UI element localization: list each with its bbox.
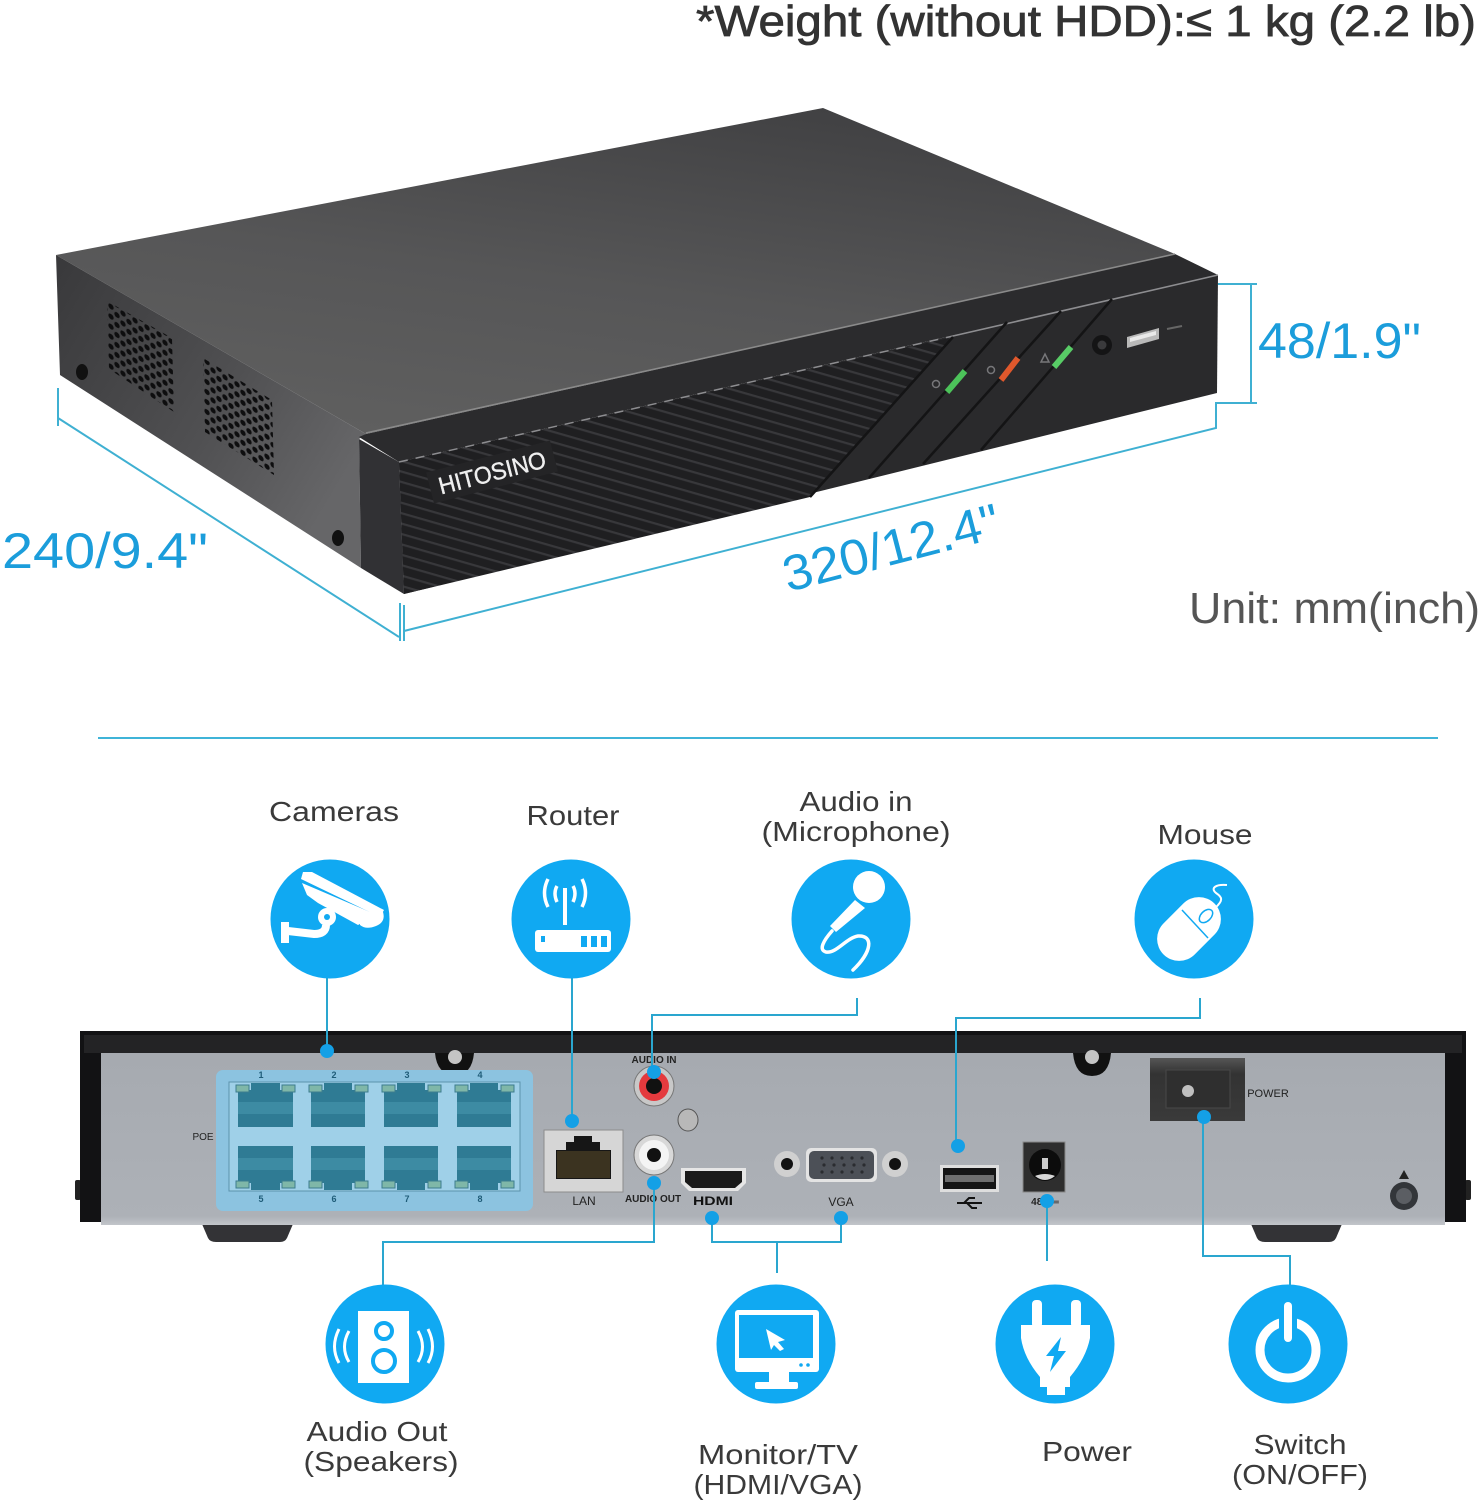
- rear panel of NVR: [75, 1031, 1471, 1242]
- front panel: [399, 275, 1218, 594]
- edge highlights: [366, 254, 1218, 462]
- audio out jack: [625, 1135, 681, 1205]
- port numbers: 6: [331, 1194, 337, 1204]
- ground screw small: [678, 1109, 698, 1131]
- dimension: height: 48/1.9": [1258, 313, 1421, 369]
- label: audio out: Audio Out: [306, 1416, 448, 1447]
- label: mouse: Mouse: [1158, 819, 1252, 850]
- dimension: height: [1218, 284, 1421, 402]
- label: cameras: Cameras: [269, 796, 399, 827]
- top surface: [56, 108, 1175, 434]
- label: switch: [1232, 1429, 1368, 1490]
- port numbers: 1: [258, 1070, 264, 1080]
- LAN port: [544, 1130, 623, 1208]
- USB mark: [1167, 326, 1182, 329]
- icon: mouse: [1134, 860, 1254, 978]
- logo: HITOSINO: [436, 447, 549, 500]
- label: audio in: Audio in: [800, 786, 912, 817]
- HDMI port: HDMI: [693, 1194, 733, 1208]
- ribbed front texture: [399, 337, 953, 594]
- port numbers: 2: [331, 1070, 337, 1080]
- side face: [56, 255, 366, 568]
- POE label: POE: [192, 1132, 214, 1143]
- port numbers: 4: [477, 1070, 483, 1080]
- audio in jack: AUDIO IN: [632, 1055, 676, 1066]
- front USB port: [1127, 328, 1159, 348]
- port numbers: 5: [258, 1194, 264, 1204]
- port numbers: [258, 1070, 483, 1204]
- LED symbols: [932, 354, 1049, 388]
- screw notch right: [1073, 1050, 1111, 1076]
- connector: router: [565, 978, 579, 1128]
- connector: power: [1040, 1194, 1054, 1261]
- audio out jack: AUDIO OUT: [625, 1194, 681, 1205]
- icon: speaker: [326, 1284, 444, 1404]
- side knobs: [75, 1180, 1471, 1200]
- ground terminal: [1390, 1170, 1418, 1210]
- connector: switch: [1197, 1110, 1290, 1285]
- frame highlight band: [84, 1035, 1462, 1053]
- connector: monitor: [705, 1211, 848, 1273]
- product photo: NVR front perspective: [56, 108, 1218, 594]
- VGA port: [774, 1148, 908, 1209]
- USB port: [940, 1165, 999, 1208]
- status LEDs: [947, 347, 1071, 392]
- side screws: [76, 364, 344, 546]
- label: switch: Switch: [1254, 1429, 1346, 1460]
- DC power jack: [1023, 1142, 1065, 1208]
- VGA port: VGA: [828, 1195, 854, 1209]
- label: power: Power: [1042, 1436, 1132, 1467]
- DC power jack: 48V ═: [1031, 1197, 1060, 1208]
- icon: plug: [996, 1284, 1114, 1404]
- port numbers: 3: [404, 1070, 410, 1080]
- port bands: [238, 1102, 511, 1170]
- label: monitor: [694, 1439, 862, 1500]
- port numbers: 8: [477, 1194, 483, 1204]
- corner chamfer: [359, 439, 404, 594]
- POE ports: [238, 1083, 511, 1190]
- label: audio out: [304, 1416, 458, 1477]
- front top strip: [359, 254, 1218, 462]
- label: audio in: (Microphone): [762, 816, 950, 847]
- icon: monitor: [716, 1284, 836, 1404]
- power switch: POWER: [1247, 1088, 1289, 1100]
- label: audio in: [762, 786, 950, 847]
- port numbers: 7: [404, 1194, 410, 1204]
- rubber feet: [202, 1224, 1342, 1242]
- icon: camera: [270, 860, 390, 978]
- icon: router: [512, 860, 630, 978]
- black frame: [80, 1031, 1466, 1222]
- connector: speakers: [383, 1176, 661, 1285]
- label: monitor: Monitor/TV: [698, 1439, 858, 1470]
- label: switch: (ON/OFF): [1232, 1459, 1368, 1490]
- dimension: depth: 240/9.4": [2, 523, 208, 579]
- icon: microphone: [792, 860, 910, 978]
- label: monitor: (HDMI/VGA): [694, 1469, 862, 1500]
- connector: mouse: [951, 998, 1200, 1153]
- HDMI port: [681, 1168, 746, 1208]
- connector: audio in: [647, 998, 857, 1079]
- divider: [98, 737, 1438, 739]
- dimension: width: 320/12.4": [777, 493, 1006, 603]
- port LEDs: [236, 1085, 514, 1188]
- screw notch left: [435, 1050, 474, 1075]
- unit note: Unit: mm(inch): [1189, 584, 1480, 633]
- label: audio out: (Speakers): [304, 1446, 458, 1477]
- connector: cameras: [320, 978, 334, 1058]
- LAN port: LAN: [572, 1194, 596, 1208]
- dimension: width: [404, 403, 1257, 631]
- IR receiver: [1092, 335, 1112, 355]
- diagonal grooves: [810, 299, 1112, 497]
- audio in jack: [632, 1055, 676, 1106]
- dimension: depth: [2, 388, 404, 641]
- grey panel: [101, 1053, 1445, 1225]
- power switch: [1150, 1058, 1289, 1121]
- label: router: Router: [526, 800, 620, 831]
- side vents: [107, 301, 274, 475]
- POE highlight box: [216, 1070, 533, 1211]
- icon: power button: [1228, 1284, 1348, 1404]
